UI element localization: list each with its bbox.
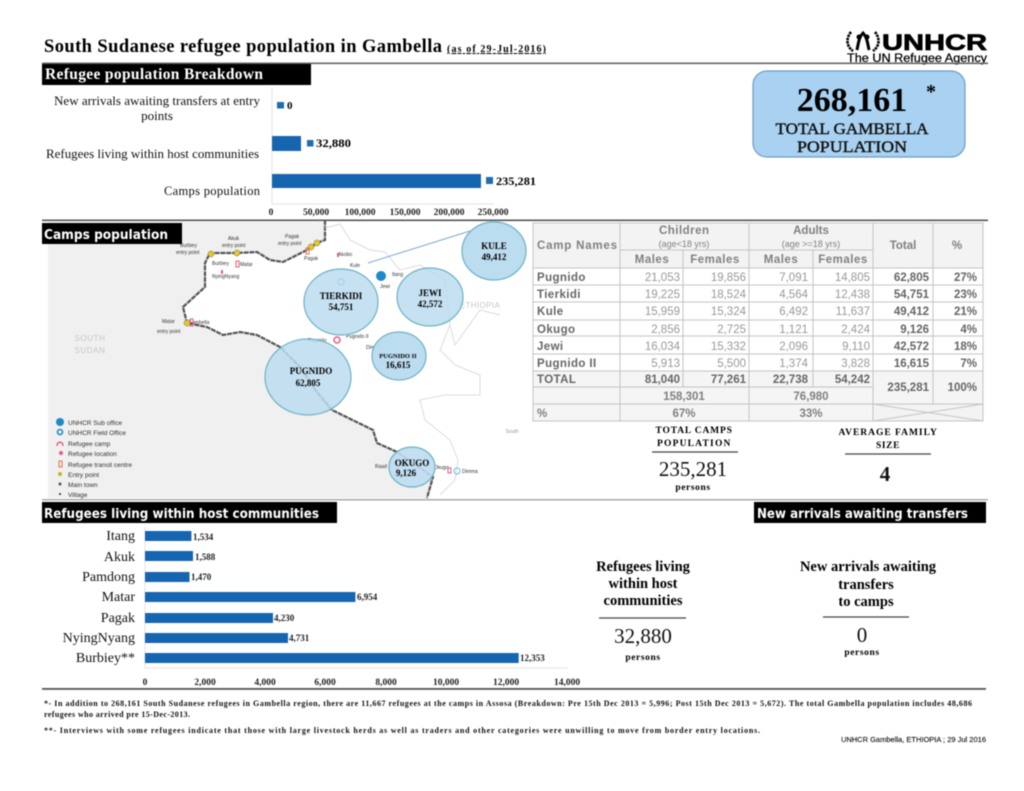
table: camp population demographics: Tierkidi xyxy=(537,289,581,301)
map: country labels: ETHIOPIA xyxy=(460,301,501,310)
map: place labels: Matar xyxy=(240,262,253,268)
stat: total camps population: TOTAL CAMPS xyxy=(656,426,732,436)
map: place labels: Pugnido xyxy=(308,338,327,344)
bar chart: refugees living within host communities: Burbiey** xyxy=(76,651,135,666)
stat: total camps population: 235,281 xyxy=(659,457,727,481)
callout: total Gambella population xyxy=(753,71,965,157)
map legend: UNHCR Sub office xyxy=(68,420,122,427)
map bubble: Pugnido II: 16,615 xyxy=(386,360,411,370)
table: camp population demographics: 2,424 xyxy=(841,324,871,336)
bar chart: refugees living within host communities: Akuk xyxy=(104,550,135,565)
map bubble: Okugo: 9,126 xyxy=(396,468,417,478)
table: camp population demographics: 4,564 xyxy=(779,289,809,301)
table: camp population demographics: 15,332 xyxy=(711,341,746,353)
table: camp population demographics: 81,040 xyxy=(645,374,680,386)
map: country labels: SOUTH xyxy=(74,334,106,343)
bar chart: refugees living within host communities: 8,000 xyxy=(375,678,397,688)
table: camp population demographics: (age<18 yrs) xyxy=(659,239,709,249)
table: camp population demographics: Pugnido xyxy=(537,272,586,284)
bar chart: refugees living within host communities: 1,588 xyxy=(195,552,216,562)
map: place labels: Pagak xyxy=(304,256,319,262)
stat: total camps population: persons xyxy=(675,483,711,493)
table: camp population demographics: Females xyxy=(690,254,740,266)
map bubble: Jewi xyxy=(397,268,463,326)
table: camp population demographics: 21% xyxy=(954,306,977,318)
footnotes: *- In addition to 268,161 South Sudanese refugees in Gambella region, there are 11,667 refugees at the camps in Assosa (Breakdown: Pre 15th Dec 2013 = 5,996; Post 15th Dec 2013 = 5,672). The total Gambella population includes 48,686 xyxy=(44,699,972,708)
stat: total camps population xyxy=(652,426,738,493)
stat: refugees living within host communities xyxy=(596,559,691,663)
stat: average family size xyxy=(838,428,938,486)
UNHCR logo: UNHCR xyxy=(882,30,987,55)
table: camp population demographics: 14,805 xyxy=(835,272,870,284)
stat: average family size: SIZE xyxy=(876,441,900,451)
table: camp population demographics: 27% xyxy=(954,272,977,284)
table: camp population demographics: Total xyxy=(890,240,916,252)
table: camp population demographics: 12,438 xyxy=(835,289,870,301)
bar chart: refugee population breakdown: points xyxy=(141,108,173,123)
map bubble: Kule: 49,412 xyxy=(482,252,507,262)
footnotes xyxy=(44,699,972,735)
table: camp population demographics: Okugo xyxy=(537,324,575,336)
bar chart: refugees living within host communities: 12,353 xyxy=(520,653,545,663)
heading: new arrivals awaiting transfers: New arrivals awaiting transfers xyxy=(757,506,968,522)
bar chart: refugee population breakdown: 0 xyxy=(287,100,293,112)
map bubble: Tierkidi: TIERKIDI xyxy=(320,291,363,301)
map: place labels: Jewi xyxy=(380,284,390,290)
table: camp population demographics: 77,261 xyxy=(711,374,747,386)
map bubble: Kule: KULE xyxy=(481,241,507,251)
map legend: Entry point xyxy=(68,472,99,479)
map: place labels: Kule xyxy=(350,263,360,269)
bar chart: refugee population breakdown: Camps population xyxy=(164,184,261,198)
map: place labels: Pagak xyxy=(285,234,300,240)
map: place labels: Itang xyxy=(392,272,403,278)
table: camp population demographics: Camp Names xyxy=(537,240,617,252)
bar chart: refugees living within host communities: 14,000 xyxy=(554,678,580,688)
table: camp population demographics: 49,412 xyxy=(894,306,929,318)
table: camp population demographics: (age >=18 yrs) xyxy=(782,239,840,249)
heading: refugees living within host communities: Refugees living within host communities xyxy=(44,506,319,522)
map: place labels: entry point xyxy=(278,241,302,247)
table: camp population demographics: Males xyxy=(764,254,798,266)
callout: total Gambella population: 268,161 xyxy=(797,82,907,119)
bar chart: refugees living within host communities: Pagak xyxy=(101,611,135,626)
table: camp population demographics: 1,121 xyxy=(779,324,808,336)
bar chart: refugees living within host communities: 1,534 xyxy=(193,532,214,542)
bar chart: refugee population breakdown: 32,880 xyxy=(316,138,351,150)
table: camp population demographics: 7% xyxy=(960,358,977,370)
bar chart: refugee population breakdown: Refugees living within host communities xyxy=(46,146,259,161)
bar chart: refugees living within host communities: 1,470 xyxy=(191,572,212,582)
map: place labels: Dimma xyxy=(366,345,382,351)
bar chart: refugees living within host communities: 6,000 xyxy=(314,678,336,688)
table: camp population demographics: 18% xyxy=(954,341,977,353)
table: camp population demographics: Females xyxy=(818,254,868,266)
map: place labels: Okugo xyxy=(434,465,449,471)
stat: new arrivals awaiting transfers: 0 xyxy=(857,623,867,647)
footnotes: refugees who arrived pre 15-Dec-2013. xyxy=(44,710,190,719)
map bubble: Pugnido: 62,805 xyxy=(296,378,321,388)
table: camp population demographics: 67% xyxy=(672,408,696,420)
map bubble: Jewi: 42,572 xyxy=(418,299,443,309)
map: camps population xyxy=(48,220,526,499)
map: South Sudan land area xyxy=(48,222,433,498)
table: camp population demographics: 235,281 xyxy=(887,382,930,394)
map: country labels: SUDAN xyxy=(74,346,106,355)
table: camp population demographics: 5,500 xyxy=(717,358,746,370)
heading: refugee population breakdown xyxy=(42,64,311,85)
stat: refugees living within host communities: persons xyxy=(625,653,661,663)
bar chart: refugees living within host communities: Itang xyxy=(106,529,135,544)
table: camp population demographics xyxy=(533,223,983,421)
table: camp population demographics: 4% xyxy=(960,324,977,336)
bar chart: refugee population breakdown: 0 xyxy=(269,208,274,218)
table: camp population demographics: 2,096 xyxy=(779,341,808,353)
table: camp population demographics: 19,856 xyxy=(711,272,746,284)
table: camp population demographics: 16,034 xyxy=(645,341,681,353)
table: camp population demographics: 54,242 xyxy=(835,374,870,386)
map bubble: Okugo xyxy=(389,447,435,487)
title: South Sudanese refugee population in Gambella xyxy=(44,37,442,57)
table: camp population demographics: % xyxy=(952,240,962,252)
map: place labels: Akuk xyxy=(228,236,240,242)
table: camp population demographics: 42,572 xyxy=(894,341,929,353)
table: camp population demographics: 7,091 xyxy=(779,272,808,284)
table: camp population demographics: 3,828 xyxy=(841,358,870,370)
map bubble: Jewi: JEWI xyxy=(418,288,442,298)
bar chart: refugees living within host communities: 2,000 xyxy=(194,678,216,688)
table: camp population demographics: Jewi xyxy=(537,341,564,353)
map: place labels: entry point xyxy=(222,243,246,249)
table: camp population demographics: 2,856 xyxy=(651,324,680,336)
map bubble: Tierkidi xyxy=(304,269,378,335)
table: camp population demographics: Children xyxy=(659,225,709,237)
map: place labels: entry point xyxy=(157,329,181,335)
map: place labels: Burbiey xyxy=(212,261,229,267)
map: place labels: entry point xyxy=(176,250,200,256)
heading: camps population: Camps population xyxy=(44,227,168,243)
callout: total Gambella population: POPULATION xyxy=(797,139,907,156)
map legend: Refugee location xyxy=(68,451,117,458)
stat: total camps population: POPULATION xyxy=(657,439,731,449)
map legend: Village xyxy=(68,492,88,499)
bar chart: refugee population breakdown: 50,000 xyxy=(303,208,329,218)
stat: new arrivals awaiting transfers: persons xyxy=(844,648,880,658)
map bubble: Pugnido II xyxy=(372,332,426,380)
heading: refugee population breakdown: Refugee population Breakdown xyxy=(45,66,263,83)
table: camp population demographics: 62,805 xyxy=(894,272,930,284)
table: camp population demographics: 21,053 xyxy=(645,272,680,284)
map: connector to Kule xyxy=(368,231,470,263)
table: camp population demographics: 33% xyxy=(799,408,823,420)
bar chart: refugees living within host communities: 10,000 xyxy=(433,678,459,688)
map: place labels: Gambella xyxy=(188,320,210,326)
table: camp population demographics: 9,110 xyxy=(842,341,870,353)
table: camp population demographics: 1,374 xyxy=(779,358,809,370)
table: camp population demographics: 23% xyxy=(954,289,977,301)
map bubble: Pugnido: PUGNIDO xyxy=(290,366,332,376)
bar chart: refugees living within host communities xyxy=(63,527,580,688)
map: internal region boundaries xyxy=(325,224,500,495)
table: camp population demographics: TOTAL xyxy=(537,374,576,386)
bar chart: refugees living within host communities: Matar xyxy=(102,590,135,605)
stat: refugees living within host communities: within host xyxy=(609,576,678,592)
map legend: Refugee transit centre xyxy=(68,462,132,469)
table: camp population demographics: 6,492 xyxy=(779,306,808,318)
map bubble: Tierkidi: 54,751 xyxy=(329,302,354,312)
map: place labels: NyingNyang xyxy=(212,274,239,280)
table: camp population demographics: 76,980 xyxy=(793,391,829,403)
map: place labels: Burbiey xyxy=(180,243,197,249)
table: camp population demographics: 16,615 xyxy=(894,358,930,370)
bar chart: refugee population breakdown: 200,000 xyxy=(434,208,465,218)
map: place labels: Matar xyxy=(162,319,175,325)
table: camp population demographics: % xyxy=(537,408,547,420)
stat: refugees living within host communities: 32,880 xyxy=(614,624,672,648)
map bubble: Pugnido II: PUGNIDO II xyxy=(379,353,417,360)
bar chart: refugees living within host communities: 0 xyxy=(143,678,148,688)
bar chart: refugees living within host communities: 12,000 xyxy=(493,678,519,688)
table: camp population demographics: 11,637 xyxy=(836,306,870,318)
map: place labels xyxy=(157,234,478,475)
bar chart: refugee population breakdown: 100,000 xyxy=(345,208,376,218)
map: country labels: South xyxy=(505,429,519,435)
map: country labels xyxy=(74,301,519,435)
map: place markers xyxy=(184,240,460,474)
table: camp population demographics: 158,301 xyxy=(663,391,705,403)
footnotes: **- Interviews with some refugees indicate that those with large livestock herds as well as traders and other categories were unwilling to move from border entry locations. xyxy=(44,726,760,735)
table: camp population demographics: 15,959 xyxy=(645,306,680,318)
map: place labels: Raad xyxy=(375,464,387,470)
credit line: UNHCR Gambella, ETHIOPIA ; 29 Jul 2016 xyxy=(841,735,986,744)
map legend: UNHCR Field Office xyxy=(68,430,126,437)
stat: average family size: 4 xyxy=(880,462,891,486)
UNHCR logo: The UN Refugee Agency xyxy=(847,53,987,65)
map legend: Refugee camp xyxy=(68,441,111,448)
table: camp population demographics: 19,225 xyxy=(645,289,680,301)
bar chart: refugee population breakdown: 235,281 xyxy=(496,176,536,188)
bar chart: refugee population breakdown: 250,000 xyxy=(478,208,509,218)
map legend xyxy=(56,418,132,499)
map bubble: Kule xyxy=(462,222,526,280)
table: camp population demographics: Adults xyxy=(793,225,829,237)
title: (as of 29-Jul-2016) xyxy=(447,44,546,55)
table: camp population demographics: 18,524 xyxy=(711,289,747,301)
table: camp population demographics: Kule xyxy=(537,306,564,318)
callout: total Gambella population: * xyxy=(926,81,936,103)
table: camp population demographics: Males xyxy=(635,254,669,266)
bar chart: refugees living within host communities: Pamdong xyxy=(82,570,135,585)
table: camp population demographics: 2,725 xyxy=(717,324,746,336)
map: international border xyxy=(183,220,433,498)
table: camp population demographics: 100% xyxy=(948,382,977,394)
stat: average family size: AVERAGE FAMILY xyxy=(838,428,938,438)
map legend: Main town xyxy=(68,482,98,489)
bar chart: refugees living within host communities: 4,731 xyxy=(289,633,310,643)
stat: new arrivals awaiting transfers xyxy=(800,559,937,658)
map: place labels: Pugnido II xyxy=(346,334,369,340)
stat: new arrivals awaiting transfers: New arrivals awaiting xyxy=(800,559,937,575)
stat: refugees living within host communities: communities xyxy=(604,593,683,609)
bar chart: refugee population breakdown xyxy=(46,88,536,218)
table: camp population demographics: 54,751 xyxy=(894,289,930,301)
map bubble: Okugo: OKUGO xyxy=(395,458,429,468)
callout: total Gambella population: TOTAL GAMBELLA xyxy=(776,121,929,138)
table: camp population demographics: 5,913 xyxy=(651,358,680,370)
map: place labels: Akobo xyxy=(338,252,352,258)
table: camp population demographics: 22,738 xyxy=(773,374,809,386)
bar chart: refugee population breakdown: New arrivals awaiting transfers at entry xyxy=(54,93,260,108)
table: camp population demographics: 9,126 xyxy=(900,324,929,336)
map: place labels: Dimma xyxy=(462,469,478,475)
bar chart: refugees living within host communities: NyingNyang xyxy=(63,631,135,646)
stat: refugees living within host communities: Refugees living xyxy=(596,559,691,575)
stat: new arrivals awaiting transfers: transfers xyxy=(838,577,894,593)
bar chart: refugees living within host communities: 4,230 xyxy=(274,613,295,623)
table: camp population demographics: 15,324 xyxy=(711,306,747,318)
stat: new arrivals awaiting transfers: to camps xyxy=(838,594,894,610)
UNHCR logo xyxy=(847,30,987,65)
bar chart: refugees living within host communities: 6,954 xyxy=(357,592,378,602)
map bubble: Pugnido xyxy=(265,339,351,415)
bar chart: refugees living within host communities: 4,000 xyxy=(254,678,276,688)
table: camp population demographics: Pugnido II xyxy=(537,358,597,370)
bar chart: refugee population breakdown: 150,000 xyxy=(390,208,421,218)
